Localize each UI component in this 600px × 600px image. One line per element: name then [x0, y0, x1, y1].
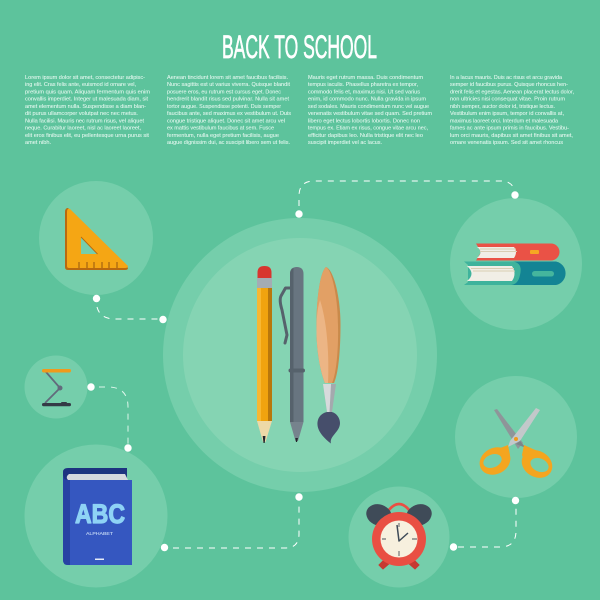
- connector: alarm clock to scissors: [450, 497, 519, 551]
- text block: column 2: fermentum, nulla eget pretium facilisis, augue: [167, 133, 279, 139]
- text block: column 1: amet nibh.: [25, 140, 51, 146]
- text block: column 2: posuere eros, eu rutrum est cursus eget. Donec: [167, 89, 281, 95]
- text block: column 1: Lorem ipsum dolor sit amet, consectetur adipisc-: [25, 75, 145, 81]
- text block: column 2: Aenean tincidunt lorem sit amet faucibus facilisis.: [167, 75, 288, 81]
- text block: column 1: neque. Curabitur laoreet, nisl ac laoreet laoreet,: [25, 126, 141, 132]
- text block: column 4: In a lacus mauris. Duis ac risus et arcu gravida: [450, 75, 563, 81]
- text block: column 2: augue dignissim dui, ac suscipit libero sem ut felis.: [167, 140, 290, 146]
- icon: scissors: [475, 408, 557, 483]
- panel: centre circle with pencil, pen and brush: [163, 218, 437, 492]
- text block: column 1: [25, 75, 150, 146]
- text block: column 3: venenatis vestibulum vitae sed quam. Sed pretium: [308, 111, 432, 117]
- text block: column 4: nibh semper, auctor dolor id, tristique lectus.: [450, 104, 555, 110]
- panel: stacked books circle: [450, 198, 582, 330]
- text block: column 3: suscipit imperdiet vel ac lacus.: [308, 140, 382, 146]
- text block: column 3: sed sodales. Mauris condimentum nunc vel augue: [308, 104, 429, 110]
- text block: column 4: maximus laoreet orci. Interdum et malesuada: [450, 118, 559, 124]
- text block: column 4: lum orci mauris, dapibus sit amet finibus sit amet,: [450, 133, 573, 139]
- text block: column 1: dit purus ullamcorper volutpat nec nec metus.: [25, 111, 138, 117]
- panel: small lamp circle: [24, 356, 88, 418]
- text block: column 4: ornare venenatis ipsum. Sed sit amet rhoncus: [450, 140, 563, 146]
- connector: centre to stacked books: [295, 181, 519, 218]
- text block: column 4: Vestibulum enim ipsum, tempor id convallis at,: [450, 111, 564, 117]
- connector: lamp to alphabet book: [87, 383, 132, 452]
- icon: alarm clock: [363, 501, 435, 569]
- icon: folding lamp: [42, 369, 71, 406]
- text block: column 2: congue tristique aliquet. Donec sit amet arcu vel: [167, 118, 285, 124]
- text block: column 1: elit eros finibus elit, eu pellentesque urna purus sit: [25, 133, 149, 139]
- icon: pen: [280, 267, 305, 442]
- label: alphabet: ALPHABET: [86, 531, 113, 536]
- title: BACK TO SCHOOL: [222, 29, 377, 65]
- panel: scissors circle: [455, 376, 577, 498]
- panel: alphabet book circle: [24, 444, 168, 588]
- text block: column 2: tortor augue. Suspendisse potenti. Duis semper: [167, 104, 281, 110]
- connector: set square to centre: [93, 295, 167, 323]
- text block: column 4: [450, 75, 574, 146]
- text block: column 2: Nunc sagittis est ut varius viverra. Quisque blandit: [167, 82, 290, 88]
- text block: column 3: enim, id commodo nunc. Nulla gravida in ipsum: [308, 97, 426, 103]
- icon: ABC book: [63, 468, 132, 565]
- text block: column 3: tempus ex. Etiam ex risus, congue vitae arcu nec,: [308, 126, 428, 132]
- icon: paint brush: [316, 267, 340, 444]
- connector: alphabet book to centre: [161, 493, 303, 551]
- label: ABC: ABC: [75, 499, 125, 529]
- text block: column 3: efficitur dapibus leo. Nulla tristique elit nec leo: [308, 133, 423, 139]
- text block: column 4: drerit felis et egestas. Aenean placerat lectus dolor,: [450, 89, 574, 95]
- text block: column 1: ing elit. Cras felis ante, euismod id ornare vel,: [25, 82, 136, 88]
- text block: column 2: faucibus ante, sed maximus ex vestibulum ut. Duis: [167, 111, 291, 117]
- text block: column 1: Nulla facilisi. Mauris nec rutrum risus, vel aliquet: [25, 118, 144, 124]
- text block: column 4: fames ac ante ipsum primis in faucibus. Vestibu-: [450, 126, 569, 132]
- panel: set square circle: [39, 181, 153, 295]
- text block: column 2: ex mattis vestibulum faucibus at sem. Fusce: [167, 126, 274, 132]
- text block: column 3: libero eget lectus lobortis lobortis. Donec non: [308, 118, 420, 124]
- text block: column 1: amet elementum nulla. Suspendisse a diam blan-: [25, 104, 146, 110]
- panel: alarm clock circle: [348, 486, 450, 588]
- text block: column 3: [308, 75, 432, 146]
- text block: column 3: tempus iaculis. Phasellus pharetra ex tempor,: [308, 82, 418, 88]
- text block: column 3: Mauris eget rutrum massa. Duis condimentum: [308, 75, 423, 81]
- text block: column 1: pretium quis quam. Aliquam fermentum quis enim: [25, 89, 150, 95]
- text block: column 2: hendrerit blandit risus sed pulvinar. Nulla sit amet: [167, 97, 289, 103]
- text block: column 4: semper id faucibus purus. Quisque rhoncus hen-: [450, 82, 568, 88]
- icon: set square: [65, 208, 128, 270]
- text block: column 3: commodo felis et, maximus nisi. Ut sed varius: [308, 89, 420, 95]
- icon: pencil: [257, 266, 272, 443]
- text block: column 4: non ultricies nisi consequat vitae. Proin rutrum: [450, 97, 565, 103]
- text block: column 2: [167, 75, 291, 146]
- icon: stacked books: [464, 244, 566, 285]
- text block: column 1: convallis imperdiet. Integer ut malesuada diam, sit: [25, 97, 148, 103]
